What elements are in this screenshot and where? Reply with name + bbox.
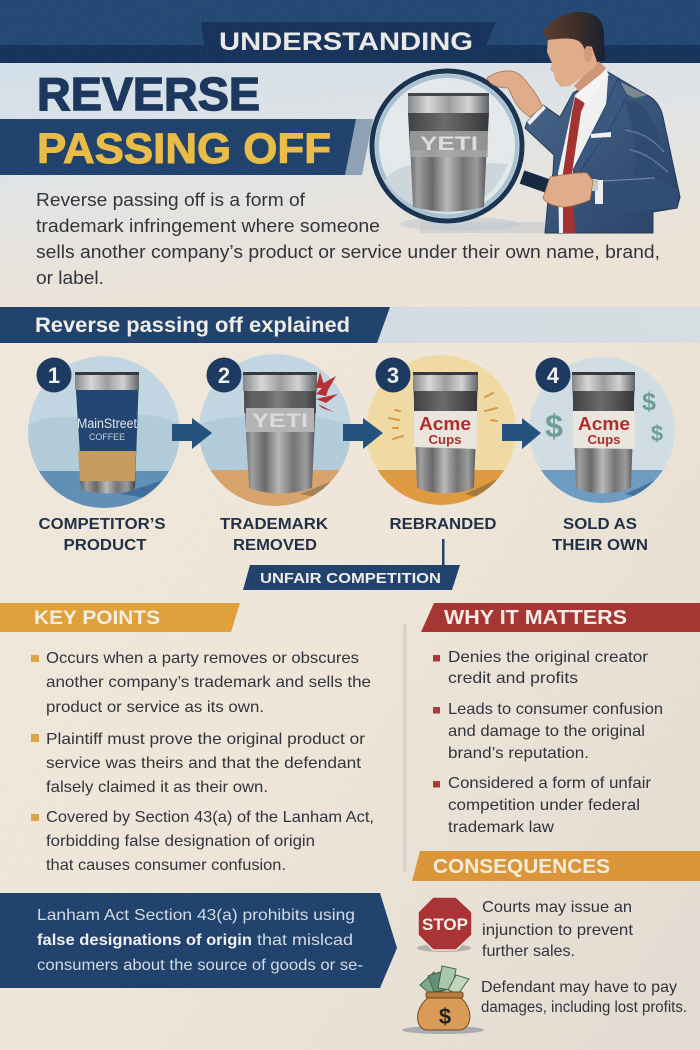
point 2: brand’s reputation. [448,745,589,762]
magnified tumbler [408,93,489,212]
dollar signs: $ [651,421,663,446]
section strip [0,307,700,343]
kicker banner: UNDERSTANDING [219,28,473,56]
scene [530,357,675,503]
dollar signs: $ [642,388,656,416]
badge [36,358,72,392]
tumbler: Cups [588,433,621,447]
point 3: competition under federal [448,797,640,814]
intro paragraph: Reverse passing off is a form of [36,189,306,210]
callout: lanham act: that mislcad [257,932,353,949]
point 2 [433,701,663,762]
panel: key points [0,603,374,874]
scene [28,356,180,508]
step 4 [530,357,675,550]
lapel [573,78,627,176]
arrow 1 [172,418,212,449]
lens [372,71,522,221]
column divider [403,624,406,872]
raised hand [487,71,542,117]
point 3: trademark law [448,819,554,836]
intro paragraph [36,189,660,288]
intro paragraph: trademark infringement where someone [36,215,380,236]
badge [206,358,242,392]
point 2: Plaintiff must prove the original product or [46,731,366,748]
jacket [525,72,680,233]
section heading [0,307,390,343]
title banner: passing off [0,119,373,175]
shoulder highlight [620,82,647,98]
panel: consequences [402,851,700,1034]
heading: KEY POINTS [34,607,160,629]
scene [200,354,350,506]
caption [220,516,329,554]
lower hand [543,173,593,207]
consequence: injunction: further sales. [482,943,575,960]
step 2 [200,354,350,550]
scene [366,355,516,505]
cuff and watch [595,180,603,204]
red scratch burst [316,372,338,412]
callout: lanham act [0,893,397,988]
tumbler: Acme [578,414,630,434]
heading: CONSEQUENCES [433,856,610,878]
title: reverse: REVERSE [37,68,260,120]
point 2: falsely claimed it as their own. [46,779,268,796]
point 3: Covered by Section 43(a) of the Lanham Act, [46,809,374,826]
handle [522,177,562,191]
icon: money bag: $ [439,1004,451,1029]
tumbler: YETI [252,411,308,432]
caption: TRADEMARK [220,516,329,533]
tumbler [572,372,635,494]
caption: REMOVED [233,537,317,554]
tie [563,97,585,233]
icon: stop sign: STOP [422,915,468,934]
point 1: Occurs when a party removes or obscures [46,650,359,667]
callout: lanham act: consumers about the source of goods or se- [37,957,363,974]
magnifying glass [372,71,562,231]
hair [543,12,605,62]
point 1: product or service as its own. [46,699,264,716]
icon: money bag [402,966,484,1034]
ear [584,46,592,62]
badge: 4 [547,363,560,388]
badge: 2 [218,363,230,388]
badge: 1 [48,363,60,388]
point 3 [433,775,652,836]
lens backdrop [385,161,508,213]
tumbler: COFFEE [89,432,125,443]
magnified tumbler: YETI [420,134,478,155]
intro paragraph: sells another company’s product or service under their own name, brand, [36,241,660,262]
point 2 [31,731,366,796]
tumbler [75,372,139,494]
panel: why it matters [421,603,700,836]
callout: lanham act: Lanham Act Section 43(a) prohibits using [37,907,355,924]
heading: WHY IT MATTERS [444,607,627,629]
point 3 [31,809,374,874]
heading [0,603,240,632]
heading [412,851,700,881]
dollar signs [545,388,663,446]
consequence: injunction [482,899,634,960]
point 3: that causes consumer confusion. [46,857,286,874]
point 2: Leads to consumer confusion [448,701,663,718]
badge [376,358,410,392]
caption: SOLD AS [563,516,637,533]
tumbler [413,372,478,494]
step 1 [28,356,180,550]
dollar signs: $ [545,408,563,444]
icon: stop sign [417,897,472,952]
tumbler [243,372,317,494]
point 3: Considered a form of unfair [448,775,652,792]
point 1: credit and profits [448,670,578,687]
tumbler: MainStreet [77,416,137,431]
consequence: damages: Defendant may have to pay [481,979,677,996]
point 2: and damage to the original [448,723,645,740]
unfair competition tag [243,565,460,590]
motion dashes [389,393,497,439]
hero background [0,63,700,307]
arrow 3 [502,418,541,449]
step 3 [366,355,516,529]
caption: REBRANDED [390,516,496,533]
illustration: businessman [420,12,680,233]
tumbler: Cups [428,433,462,447]
callout: lanham act: false designations of origin [37,932,252,949]
lens shadow [400,217,520,231]
consequence: damages: damages, including lost profits. [481,999,687,1016]
point 2: service was theirs and that the defendant [46,755,362,772]
consequence: damages [481,979,687,1016]
ground shadow [420,222,545,233]
caption [38,516,166,554]
point 3: forbidding false designation of origin [46,833,315,850]
neck and face [574,60,606,96]
connector line [442,539,444,567]
badge: 3 [387,363,399,388]
point 1: Denies the original creator [448,649,649,666]
consequence: injunction: Courts may issue an [482,899,632,916]
point 1 [31,650,371,716]
consequence: injunction: injunction to prevent [482,922,634,939]
heading [421,603,700,632]
caption: PRODUCT [64,537,147,554]
title banner: passing off: PASSING OFF [37,125,331,173]
point 1 [433,649,649,687]
badge [536,358,570,392]
collar [576,70,609,104]
shirt [558,70,608,233]
unfair competition tag: UNFAIR COMPETITION [260,570,441,587]
section heading: Reverse passing off explained [35,314,350,337]
header band [0,0,700,63]
arrow 2 [343,418,383,449]
caption: COMPETITOR’S [38,516,166,533]
point 1: another company’s trademark and sells the [46,674,371,691]
pocket square [591,132,611,138]
intro paragraph: or label. [36,267,104,288]
kicker banner [201,22,496,63]
caption [552,516,648,554]
tumbler: Acme [419,414,471,434]
sleeve shading [625,100,672,190]
caption: THEIR OWN [552,537,648,554]
